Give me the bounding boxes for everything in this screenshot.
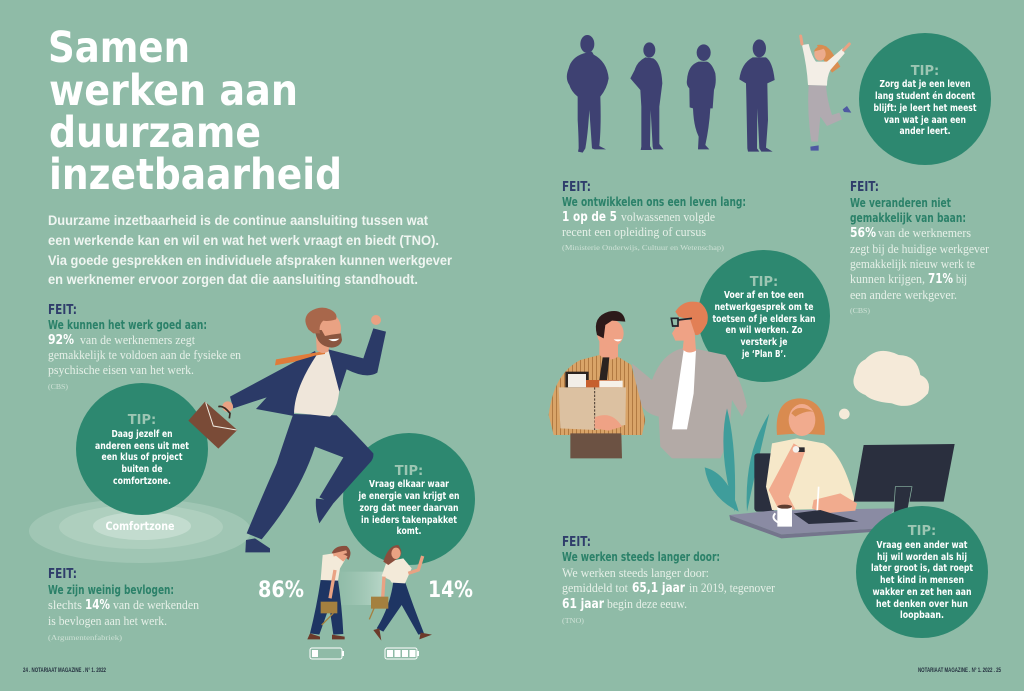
- fact: veranderen van baan: bij: [956, 272, 967, 286]
- tip circle: comfortzone: buiten de: [122, 464, 163, 475]
- title: inzetbaarheid: [49, 150, 342, 200]
- fact: werk goed aan: We kunnen het werk goed aan:: [48, 318, 207, 332]
- fact: veranderen van baan: 71%: [928, 271, 953, 287]
- fact: langer doorwerken: in 2019, tegenover: [689, 581, 776, 595]
- fact: veranderen van baan: kunnen krijgen,: [850, 272, 925, 286]
- tip circle: leven lang student: blijft: je leert het meest: [874, 103, 977, 114]
- fact: langer doorwerken: We werken steeds langer door:: [562, 566, 709, 580]
- fact: leven lang ontwikkelen: (Ministerie Onderwijs, Cultuur en Wetenschap): [562, 243, 725, 252]
- title: [48, 23, 342, 200]
- tip circle: energie: TIP:: [395, 464, 423, 479]
- fact: langer doorwerken: begin deze eeuw.: [607, 597, 687, 611]
- fact: leven lang ontwikkelen: recent een opleiding of cursus: [562, 225, 706, 239]
- illustration: thought cloud: [839, 351, 929, 419]
- footer left: 24 . NOTARIAAT MAGAZINE . N° 1. 2022: [23, 668, 106, 674]
- fact: veranderen van baan: We veranderen niet: [850, 196, 951, 210]
- title: werken aan: [49, 66, 298, 116]
- tip circle: comfortzone: anderen eens uit met: [95, 441, 189, 452]
- fact: werk goed aan: gemakkelijk te voldoen aan de fysieke en: [48, 348, 242, 362]
- fact: leven lang ontwikkelen: We ontwikkelen ons een leven lang:: [562, 195, 746, 209]
- fact: leven lang ontwikkelen: 1 op de 5: [562, 209, 617, 225]
- fact: werk goed aan: [48, 303, 242, 391]
- fact: veranderen van baan: een andere werkgever.: [850, 288, 957, 302]
- tip circle: energie: komt.: [396, 526, 422, 537]
- tip circle: energie: in ieders takenpakket: [361, 515, 457, 526]
- tip circle: comfortzone: [76, 383, 208, 515]
- tip circle: loopbaan: hij wil worden als hij: [877, 552, 967, 563]
- tip circle: netwerkgesprek: toetsen of je elders kan: [712, 314, 816, 325]
- fact: weinig bevlogen: is bevlogen aan het werk.: [48, 614, 167, 628]
- tip circle: loopbaan: het kind in mensen: [880, 575, 964, 586]
- fact: veranderen van baan: [850, 180, 990, 315]
- intro text: [48, 213, 453, 287]
- tip circle: leven lang student: van wat je aan een: [884, 115, 966, 126]
- illustration: tired and energetic women: [307, 545, 432, 641]
- intro text: een werkende kan en wil en wat het werk vraagt en biedt (TNO).: [48, 233, 439, 248]
- tip circle: leven lang student: Zorg dat je een leven: [880, 79, 971, 90]
- fact: weinig bevlogen: [48, 567, 200, 642]
- tip circle: leven lang student: ander leert.: [900, 126, 950, 137]
- fact: langer doorwerken: (TNO): [562, 616, 585, 625]
- tip circle: energie: Vraag elkaar waar: [369, 479, 449, 490]
- tip circle: comfortzone: een klus of project: [102, 452, 183, 463]
- title: Samen: [48, 23, 190, 73]
- comfort zone rings: Comfortzone: [106, 519, 175, 533]
- tip circle: energie: [343, 433, 475, 565]
- fact: weinig bevlogen: FEIT:: [48, 567, 77, 582]
- fact: weinig bevlogen: slechts: [48, 598, 82, 612]
- stat: 86 percent: 86%: [258, 578, 304, 603]
- fact: veranderen van baan: gemakkelijk nieuw werk te: [850, 257, 975, 271]
- fact: leven lang ontwikkelen: FEIT:: [562, 180, 591, 195]
- fact: langer doorwerken: gemiddeld tot: [562, 581, 628, 595]
- fact: weinig bevlogen: (Argumentenfabriek): [48, 633, 123, 642]
- fact: leven lang ontwikkelen: [562, 180, 746, 252]
- tip circle: loopbaan: TIP:: [908, 524, 936, 539]
- tip circle: netwerkgesprek: Voer af en toe een: [724, 290, 804, 301]
- fact: langer doorwerken: FEIT:: [562, 535, 591, 550]
- fact: veranderen van baan: gemakkelijk van baan:: [850, 211, 966, 225]
- fact: weinig bevlogen: van de werkenden: [113, 598, 200, 612]
- tip circle: netwerkgesprek: [698, 250, 830, 382]
- tip circle: netwerkgesprek: je ‘Plan B’.: [741, 349, 786, 360]
- tip circle: loopbaan: Vraag een ander wat: [876, 540, 968, 551]
- tip circle: energie: je energie van krijgt en: [358, 491, 460, 502]
- fact: leven lang ontwikkelen: volwassenen volgde: [621, 210, 715, 224]
- intro text: en werknemer ervoor zorgen dat die aansluiting standhoudt.: [48, 272, 418, 287]
- fact: werk goed aan: 92%: [48, 332, 74, 348]
- illustration: silhouettes of four people: [567, 35, 775, 153]
- icon: low battery: [310, 648, 344, 659]
- fact: veranderen van baan: (CBS): [850, 306, 871, 315]
- fact: werk goed aan: (CBS): [48, 382, 69, 391]
- fact: veranderen van baan: zegt bij de huidige werkgever: [850, 242, 990, 256]
- comfort zone rings: [29, 499, 251, 563]
- fact: veranderen van baan: 56%: [850, 225, 876, 241]
- fact: werk goed aan: FEIT:: [48, 303, 77, 318]
- tip circle: netwerkgesprek: netwerkgesprek om te: [714, 302, 814, 313]
- tip circle: loopbaan: loopbaan.: [900, 610, 944, 621]
- fact: langer doorwerken: 65,1 jaar: [632, 580, 685, 596]
- fact: weinig bevlogen: We zijn weinig bevlogen:: [48, 583, 174, 597]
- tip circle: comfortzone: TIP:: [128, 413, 156, 428]
- fact: veranderen van baan: FEIT:: [850, 180, 879, 195]
- tip circle: loopbaan: wakker en zet hen aan: [872, 587, 972, 598]
- tip circle: netwerkgesprek: TIP:: [750, 275, 778, 290]
- illustration: running man with briefcase: [188, 308, 386, 552]
- tip circle: loopbaan: het denken over hun: [876, 599, 968, 610]
- tip circle: leven lang student: [859, 33, 991, 165]
- tip circle: leven lang student: lang student én docent: [875, 90, 975, 102]
- illustration: colleagues with moving box: [549, 302, 747, 458]
- tip circle: loopbaan: later groot is, dat roept: [871, 563, 973, 574]
- tip circle: netwerkgesprek: versterk je: [740, 337, 788, 348]
- fact: langer doorwerken: 61 jaar: [562, 596, 604, 612]
- tip circle: comfortzone: Daag jezelf en: [112, 429, 173, 440]
- illustration: cheering woman: [801, 36, 851, 151]
- tip circle: energie: zorg dat meer daarvan: [360, 503, 459, 514]
- title: duurzame: [49, 108, 261, 158]
- tip circle: comfortzone: comfortzone.: [113, 476, 171, 487]
- icon: full battery: [385, 648, 419, 659]
- intro text: Duurzame inzetbaarheid is de continue aansluiting tussen wat: [48, 213, 428, 228]
- illustration: woman at desk with monitor: [705, 398, 955, 538]
- intro text: Via goede gesprekken en individuele afspraken kunnen werkgever: [48, 253, 453, 268]
- fact: werk goed aan: van de werknemers zegt: [80, 333, 195, 347]
- fact: werk goed aan: psychische eisen van het werk.: [48, 363, 194, 377]
- tip circle: netwerkgesprek: en wil werken. Zo: [726, 325, 803, 336]
- tip circle: loopbaan: [856, 506, 988, 638]
- tip circle: leven lang student: TIP:: [911, 64, 939, 79]
- fact: weinig bevlogen: 14%: [85, 597, 110, 613]
- stat: 14 percent: 14%: [428, 578, 473, 603]
- fact: langer doorwerken: We werken steeds langer door:: [562, 550, 720, 564]
- fact: veranderen van baan: van de werknemers: [878, 226, 971, 240]
- fact: langer doorwerken: [562, 535, 776, 625]
